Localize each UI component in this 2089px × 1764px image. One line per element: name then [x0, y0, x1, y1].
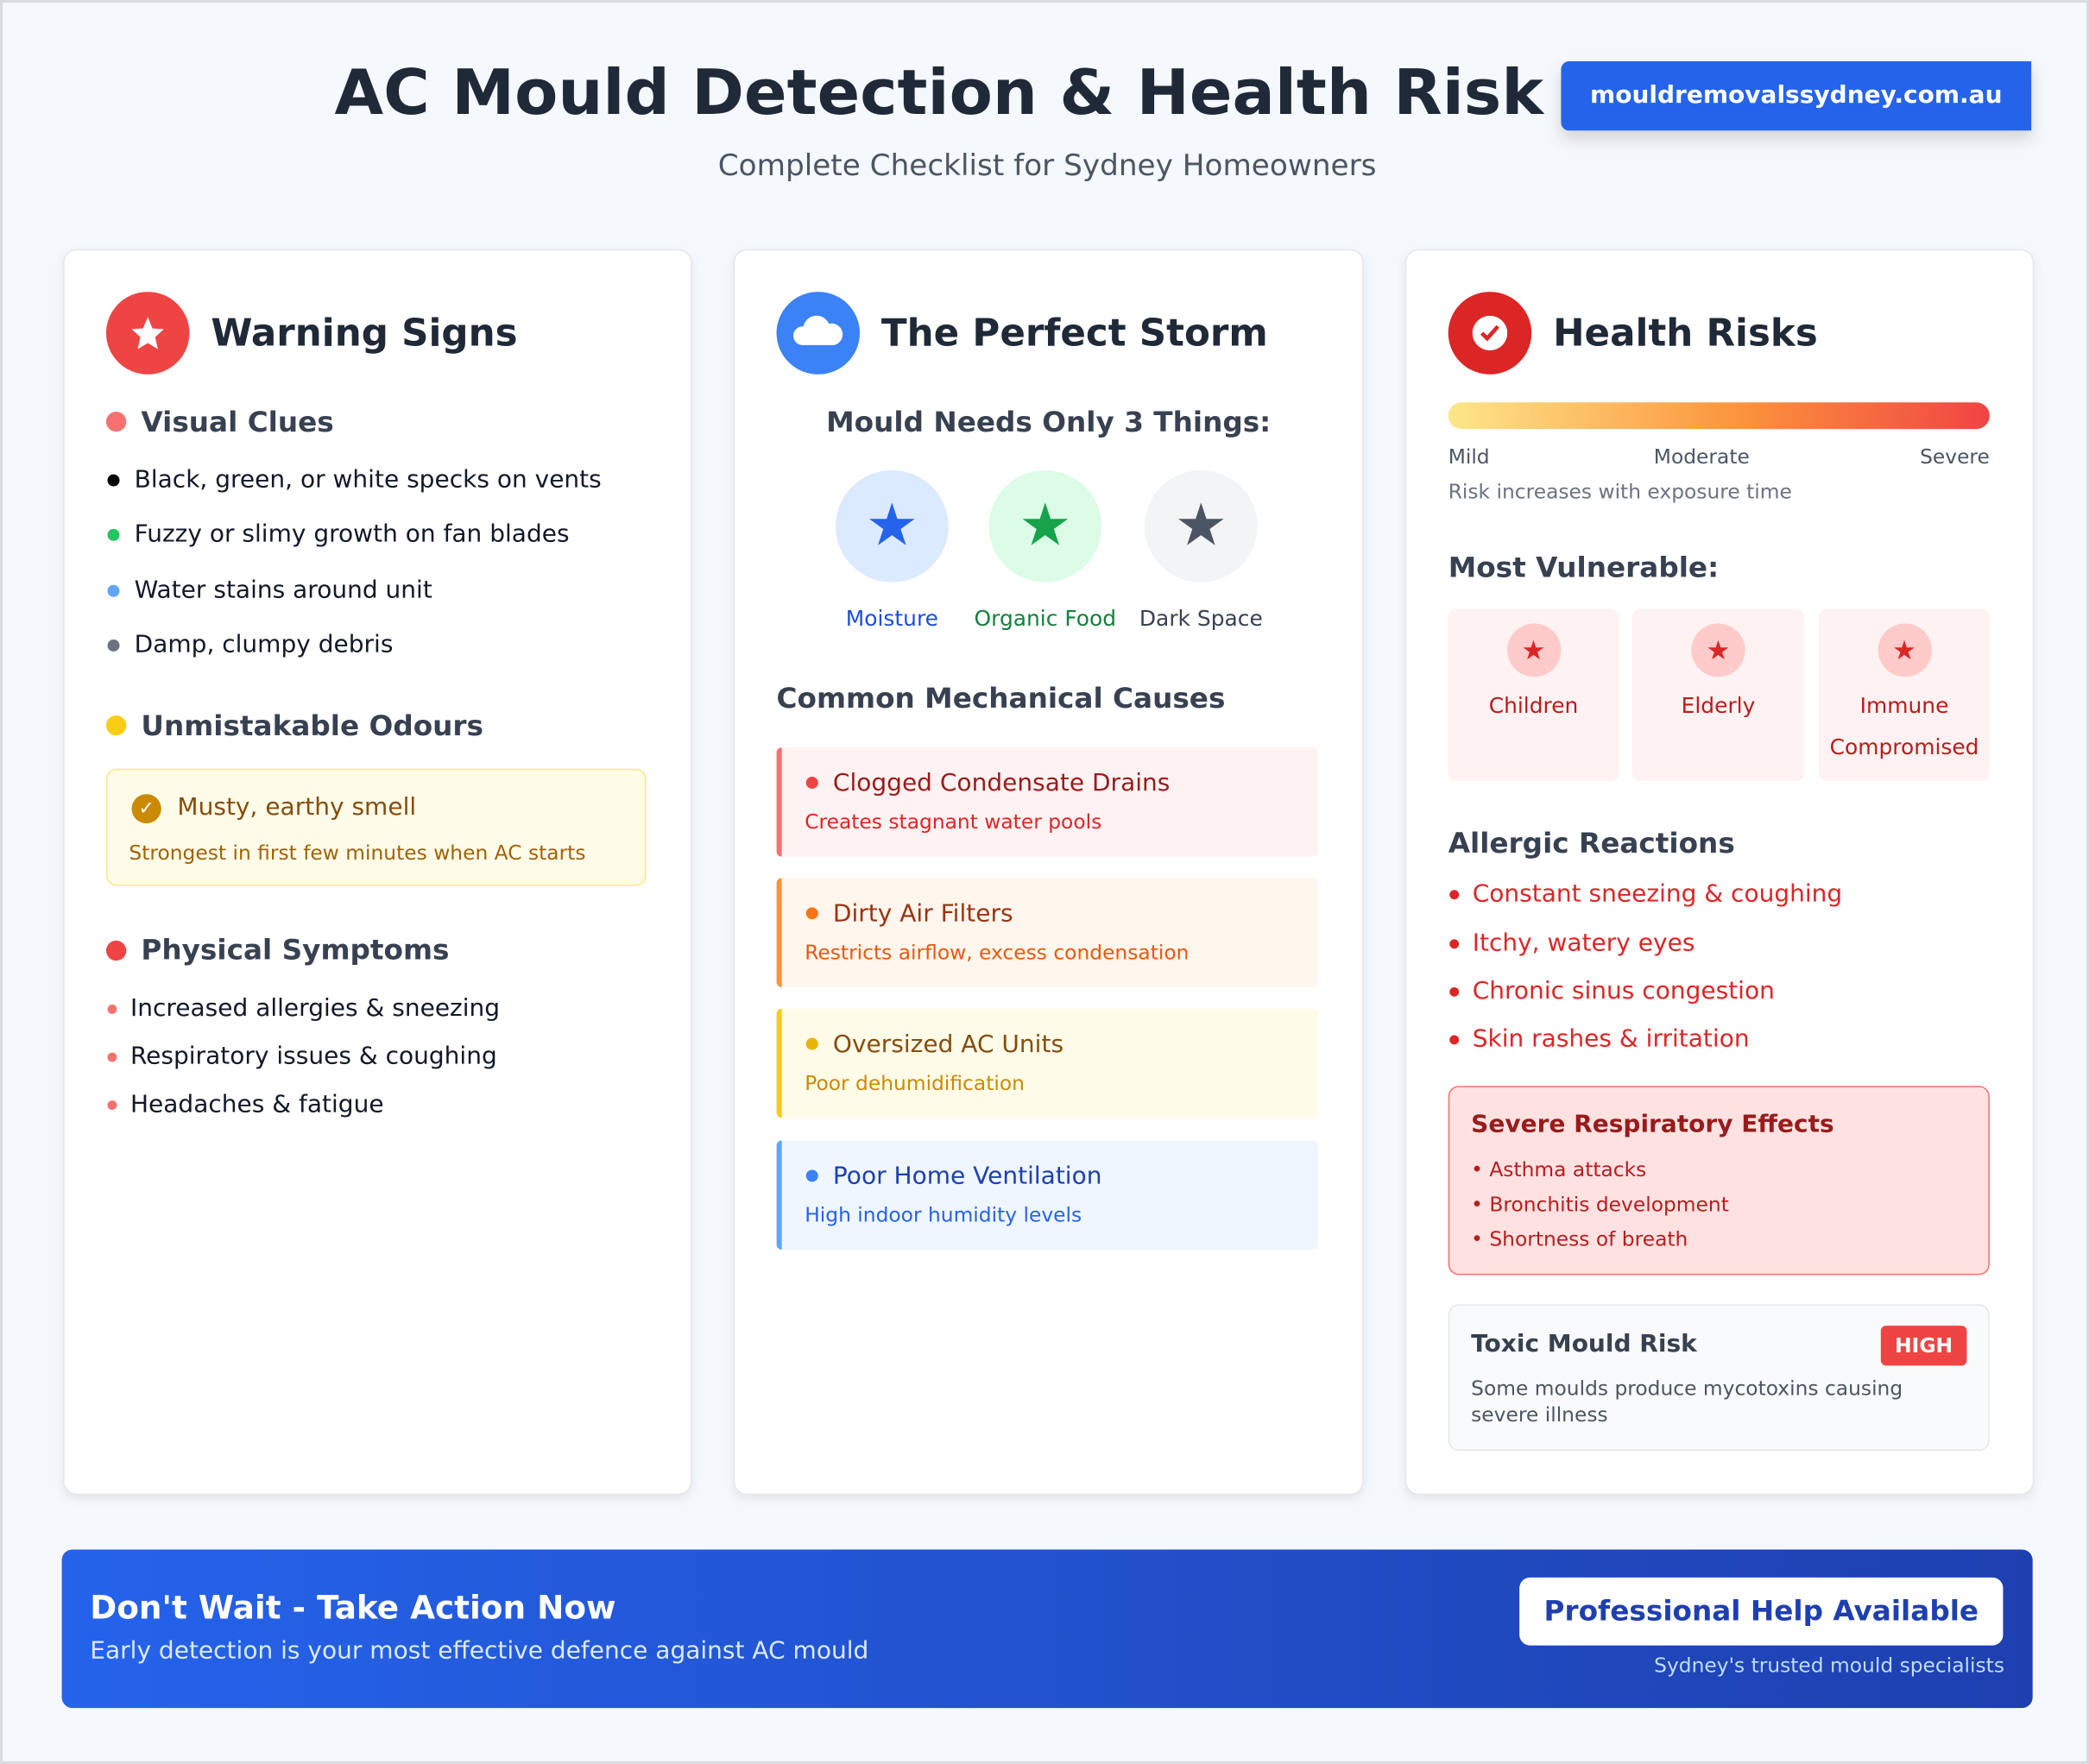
section: visual clues: Visual Clues: [141, 406, 334, 438]
allergic reactions: [1448, 828, 1842, 1053]
title: AC Mould Detection & Health Risk (Sydney): [335, 57, 1884, 130]
icons: three needs: Dark Space: [1139, 606, 1263, 631]
cause: filters: Dirty Air Filters: [833, 900, 1013, 928]
heading: The Perfect Storm: [881, 311, 1268, 355]
cause: drains: [777, 747, 1318, 857]
banner: call to action: Don't Wait - Take Action Now: [90, 1590, 615, 1627]
card: immune: Immune: [1860, 693, 1948, 718]
section: odours: [105, 710, 647, 886]
card: immune: [1819, 609, 1990, 781]
scale labels: Mild: [1448, 445, 1490, 469]
cause: drains: Creates stagnant water pools: [805, 810, 1101, 834]
callout: toxic mould: HIGH: [1895, 1333, 1953, 1358]
banner: call to action: [62, 1549, 2033, 1708]
cause: ventilation: [777, 1140, 1318, 1250]
card: children: [1448, 609, 1619, 781]
section: physical symptoms: Increased allergies & sneezing: [130, 994, 500, 1023]
section: visual clues: Black, green, or white specks on vents: [135, 466, 602, 494]
cause: oversized: [777, 1009, 1318, 1118]
callout: severe respiratory: • Bronchitis development: [1471, 1193, 1729, 1216]
heading: Health Risks: [1553, 311, 1818, 355]
callout: musty smell: Strongest in first few minutes when AC starts: [129, 841, 585, 865]
button: Professional Help Available: [1544, 1595, 1979, 1627]
website badge: [1561, 61, 2031, 130]
cause: ventilation: High indoor humidity levels: [805, 1203, 1082, 1227]
button: [1519, 1578, 2003, 1646]
card: elderly: [1632, 609, 1804, 781]
callout: toxic mould: [1448, 1304, 1990, 1451]
allergic reactions: Skin rashes & irritation: [1473, 1025, 1750, 1053]
cause: oversized: Poor dehumidification: [805, 1071, 1025, 1095]
callout: severe respiratory: • Asthma attacks: [1471, 1158, 1646, 1181]
cause: drains: Clogged Condensate Drains: [833, 770, 1170, 797]
icon: cloud: [777, 292, 860, 375]
heading: Warning Signs: [211, 311, 518, 355]
panel: health risks: [1405, 249, 2034, 1495]
card: elderly: Elderly: [1682, 693, 1755, 718]
heading: mechanical causes: Common Mechanical Causes: [777, 682, 1225, 714]
callout: toxic mould: severe illness: [1471, 1403, 1608, 1427]
section: odours: Unmistakable Odours: [141, 710, 483, 742]
section: physical symptoms: Respiratory issues & coughing: [130, 1043, 497, 1070]
panel: perfect storm: [734, 249, 1364, 1495]
allergic reactions: Chronic sinus congestion: [1473, 977, 1775, 1005]
card: immune: Compromised: [1830, 734, 1979, 759]
callout: toxic mould: Some moulds produce mycotoxins causing: [1471, 1377, 1903, 1401]
allergic reactions: Allergic Reactions: [1448, 828, 1735, 860]
icons: three needs: [836, 470, 1263, 631]
allergic reactions: Constant sneezing & coughing: [1473, 880, 1842, 908]
allergic reactions: Itchy, watery eyes: [1473, 929, 1695, 957]
subheading: 3 things: Mould Needs Only 3 Things:: [826, 406, 1271, 438]
callout: severe respiratory: • Shortness of breath: [1471, 1227, 1688, 1251]
icons: three needs: ★: [866, 492, 918, 559]
section: visual clues: [105, 406, 602, 658]
icon: check: [1448, 292, 1531, 375]
callout: musty smell: [106, 769, 647, 886]
icons: three needs: ★: [1175, 492, 1228, 559]
callout: musty smell: ✓: [138, 798, 155, 819]
banner: call to action: Sydney's trusted mould specialists: [1654, 1654, 2004, 1678]
callout: severe respiratory: [1448, 1086, 1990, 1275]
scale labels: Severe: [1920, 445, 1990, 469]
callout: severe respiratory: Severe Respiratory Effects: [1471, 1111, 1834, 1138]
section: visual clues: Damp, clumpy debris: [135, 631, 393, 658]
cause: oversized: Oversized AC Units: [833, 1030, 1063, 1059]
scale labels: Risk increases with exposure time: [1448, 480, 1792, 504]
icons: three needs: Organic Food: [975, 606, 1116, 631]
section: physical symptoms: [105, 934, 500, 1118]
section: visual clues: Water stains around unit: [135, 576, 432, 604]
callout: musty smell: Musty, earthy smell: [177, 793, 416, 822]
cause: filters: [777, 878, 1318, 987]
scale labels: [1448, 445, 1990, 504]
section: physical symptoms: Physical Symptoms: [141, 934, 449, 966]
risk gradient bar: [1448, 402, 1990, 429]
section: physical symptoms: Headaches & fatigue: [130, 1091, 384, 1118]
panel: warning signs: [63, 249, 691, 1495]
section: visual clues: Fuzzy or slimy growth on fan blades: [135, 520, 570, 548]
heading: vulnerable: Most Vulnerable:: [1448, 551, 1719, 583]
subtitle: Complete Checklist for Sydney Homeowners: [718, 150, 1377, 183]
card: children: ★: [1522, 634, 1545, 666]
cause: filters: Restricts airflow, excess condensation: [805, 941, 1189, 965]
card: children: Children: [1489, 693, 1578, 718]
banner: call to action: Early detection is your most effective defence against AC mould: [90, 1637, 868, 1665]
card: elderly: ★: [1707, 634, 1730, 666]
icon: star: [106, 292, 189, 375]
icons: three needs: ★: [1019, 492, 1071, 559]
scale labels: Moderate: [1654, 445, 1750, 469]
callout: toxic mould: Toxic Mould Risk: [1471, 1330, 1697, 1358]
card: immune: ★: [1892, 634, 1916, 666]
website badge: mouldremovalssydney.com.au: [1590, 81, 2003, 110]
cause: ventilation: Poor Home Ventilation: [833, 1162, 1102, 1190]
icons: three needs: Moisture: [846, 606, 938, 631]
